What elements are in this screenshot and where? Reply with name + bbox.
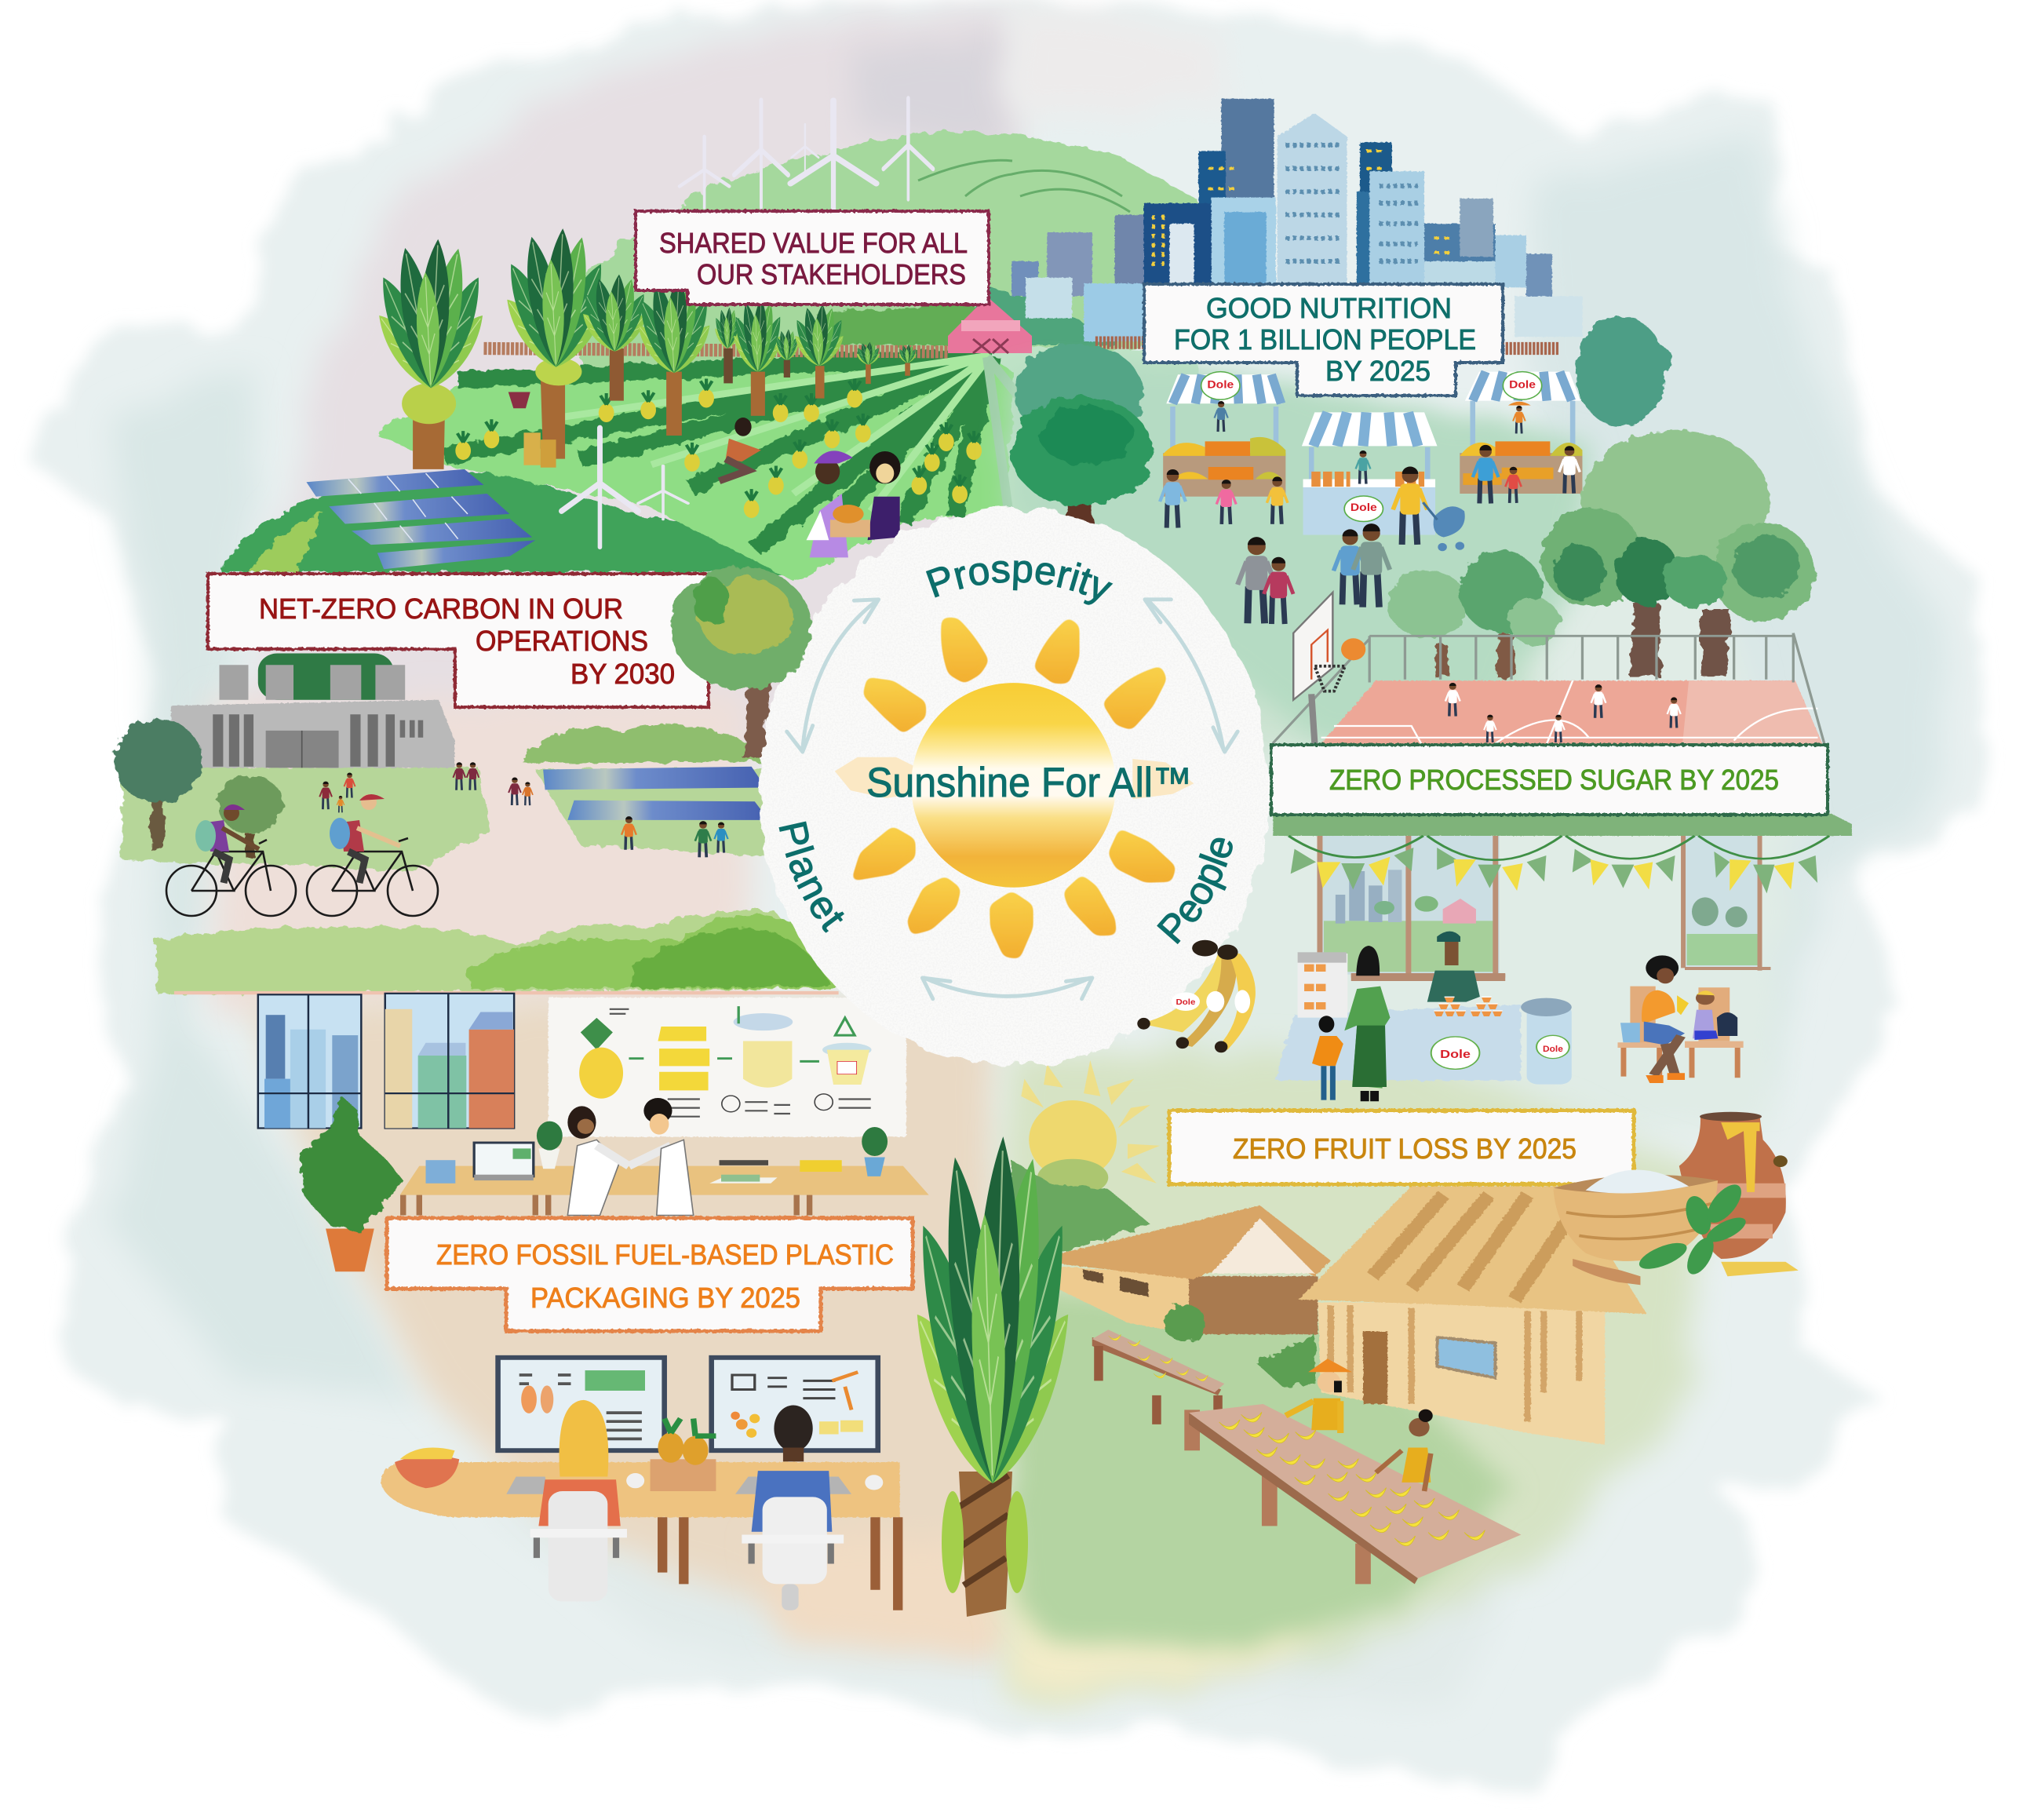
left hill: [219, 472, 787, 575]
label: zero fruit loss: ZERO FRUIT LOSS BY 2025: [1233, 1132, 1576, 1165]
factory building: [171, 653, 455, 768]
tree trunk beside net-zero label: [742, 675, 773, 757]
window right: [385, 994, 514, 1129]
label: zero fruit loss: [1169, 1111, 1634, 1184]
benches and family: [1617, 955, 1744, 1083]
label: net-zero carbon: OPERATIONS: [476, 625, 648, 657]
process poster: [549, 998, 906, 1137]
green ground: [1012, 360, 1592, 743]
city skyline: [1012, 99, 1582, 341]
potted plant: [300, 1096, 403, 1271]
mint ground under tree: [981, 345, 1201, 565]
dole badges: Dole: [1509, 379, 1536, 391]
green field: [1012, 1288, 1515, 1648]
pale side rays: [835, 757, 1194, 799]
child in orange: [1312, 1016, 1343, 1100]
big foreground palm: [907, 1133, 1078, 1617]
market stall right: [1460, 372, 1582, 494]
label: net-zero carbon: [208, 574, 709, 707]
sun rays: [851, 618, 1176, 958]
dole badges: [1431, 1035, 1569, 1069]
dole badges: [1201, 372, 1542, 522]
dole badges: Dole: [1543, 1045, 1563, 1054]
wind turbines on hill: [680, 98, 933, 220]
label: good nutrition: GOOD NUTRITION: [1206, 292, 1452, 324]
label: zero fossil fuel plastic: [387, 1218, 913, 1331]
label: good nutrition: BY 2025: [1325, 355, 1431, 387]
sun disc: [911, 683, 1116, 888]
lower solar panels: [543, 767, 769, 820]
seated worker blue: [742, 1405, 844, 1610]
solar panels hill: [306, 469, 535, 569]
shop awning: [1273, 814, 1852, 836]
scene: Q2 city, market, court: [1012, 99, 1824, 745]
honey pot, flour bowl and mint: [1553, 1112, 1799, 1285]
bananas bunch: Dole: [1176, 998, 1195, 1007]
cyclist red: [330, 794, 400, 883]
keyboards and mice: [506, 1473, 883, 1494]
farmhouse left: [1031, 1205, 1331, 1334]
fence: [1095, 343, 1560, 348]
customer in green: [1344, 946, 1390, 1101]
pineapples: [455, 378, 982, 518]
bicycle wheels: [166, 838, 438, 916]
cyclist purple: [195, 804, 259, 883]
big trees: [1387, 430, 1814, 677]
bush behind sun: [1012, 1160, 1150, 1264]
scene: Q4 village and harvest: [1012, 1060, 1647, 1648]
seated worker blonde: [530, 1400, 627, 1602]
kneeling farmer: [720, 418, 761, 481]
drying table small: [1092, 1329, 1224, 1424]
scientists: [567, 1098, 694, 1215]
dole badges: Dole: [1350, 502, 1377, 514]
label: shared value: [636, 211, 989, 305]
cycle arrows: [787, 600, 1237, 999]
flour bowl: [1553, 1170, 1718, 1285]
market stall left: [1163, 374, 1285, 497]
curved label: People: People: [1157, 838, 1233, 945]
drying table large: [1189, 1404, 1521, 1584]
workers with pineapple crate: [807, 450, 901, 557]
curved label: Prosperity: Prosperity: [926, 560, 1113, 605]
counter: [1275, 952, 1572, 1085]
center medallion: [759, 509, 1269, 1066]
basketball court: [1273, 633, 1824, 745]
scene: Q3 lab and office: [155, 910, 929, 1610]
label: shared value: OUR STAKEHOLDERS: [697, 258, 966, 290]
big green tree by the market: [1011, 344, 1152, 534]
teal bush: [1576, 316, 1673, 427]
label: net-zero carbon: BY 2030: [570, 658, 675, 690]
dole badges: Dole: [1207, 379, 1234, 391]
field path: [987, 357, 1028, 510]
lab bench: [400, 1122, 929, 1215]
bushes: [1164, 1304, 1314, 1387]
label: zero processed sugar: ZERO PROCESSED SUGAR BY 2025: [1329, 764, 1779, 796]
hill contour lines: [918, 160, 1130, 212]
label: good nutrition: [1144, 284, 1503, 396]
monitors: [498, 1358, 878, 1450]
tree over net-zero label: [671, 567, 812, 689]
scene: cyclists: [166, 794, 438, 916]
market stall middle: [1302, 412, 1438, 535]
wind turbines in field: [562, 428, 688, 547]
label: zero fossil fuel plastic: ZERO FOSSIL FUEL-BASED PLASTIC: [436, 1238, 894, 1271]
baby stroller: [1423, 502, 1465, 551]
curved label: Planet: Planet: [778, 821, 844, 933]
fruit bowl: [395, 1447, 459, 1488]
center title: Sunshine For All™: [866, 760, 1192, 806]
honey pot: [1679, 1112, 1799, 1276]
harvest baskets: [508, 392, 556, 468]
faded sun: [1021, 1060, 1160, 1196]
banana palms: [372, 227, 917, 469]
left trees: [114, 719, 282, 857]
pineapple crate: [651, 1419, 716, 1491]
cups: [1434, 997, 1503, 1016]
sun and arrows: [787, 600, 1237, 999]
wall strip: [174, 990, 839, 995]
scene: shop, bunting, seated family: [1273, 814, 1852, 1101]
bananas bunch: [1137, 940, 1256, 1052]
pink barn: [948, 297, 1032, 353]
dole badges: Dole: [1440, 1049, 1471, 1061]
window left: [258, 994, 361, 1129]
fence: [483, 348, 948, 352]
label: zero processed sugar: [1271, 745, 1828, 815]
main hill: [581, 130, 1198, 377]
windows: [1320, 836, 1770, 977]
tiny people: [319, 762, 728, 857]
basketball hoop: [1293, 593, 1365, 743]
market visitors: [1160, 445, 1580, 624]
scene: Q1 farm, turbines, factory: [114, 98, 1013, 871]
green foreground bushes: [155, 910, 839, 994]
office desk: [381, 1462, 900, 1610]
paper circle: [759, 509, 1269, 1066]
label: zero fossil fuel plastic: PACKAGING BY 2025: [530, 1282, 800, 1314]
farm field: [374, 354, 1013, 581]
label: good nutrition: FOR 1 BILLION PEOPLE: [1174, 323, 1476, 356]
label: shared value: SHARED VALUE FOR ALL: [659, 227, 968, 259]
label: net-zero carbon: NET-ZERO CARBON IN OUR: [259, 593, 623, 625]
factory ground: [122, 724, 774, 871]
mint leaves: [1635, 1180, 1750, 1278]
farmhouse right: [1299, 1187, 1647, 1445]
bunting: [1289, 836, 1829, 893]
harvesters: [1285, 1359, 1433, 1491]
seller: [1427, 932, 1480, 1002]
